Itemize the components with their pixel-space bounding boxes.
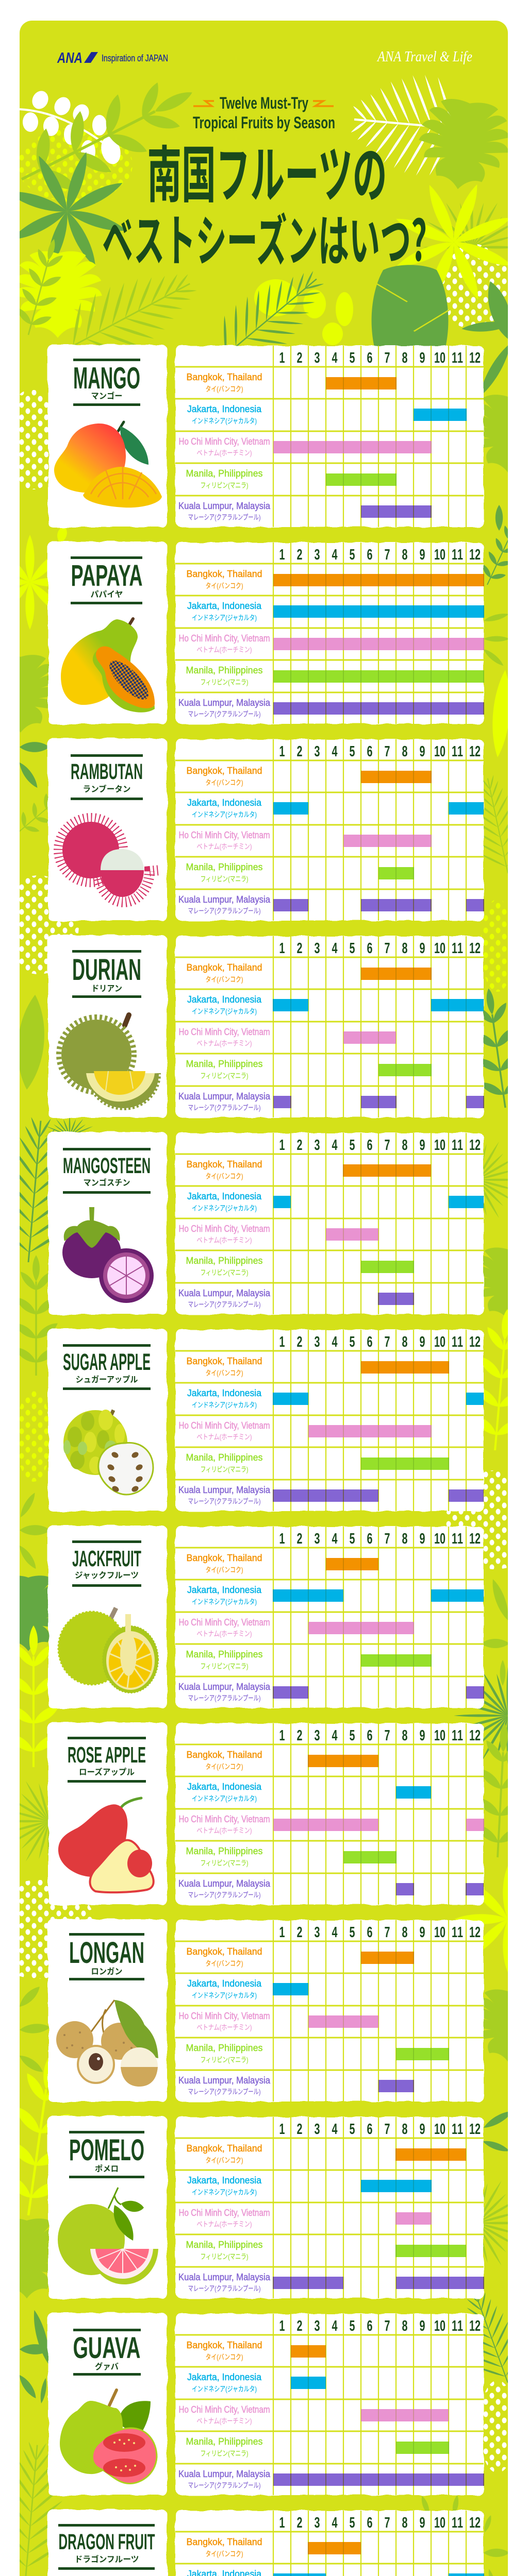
fruit name (71, 556, 142, 604)
row: Jakarta, Indonesia (187, 1978, 308, 1999)
fruit card (48, 935, 167, 1117)
month header: 123456789101112 (279, 1137, 481, 1154)
fruit name: マンゴー (91, 391, 123, 401)
fruit card (48, 1526, 167, 1708)
row: Manila, Philippines (186, 1059, 432, 1080)
row: Bangkok, Thailand: タイ(バンコク) (205, 1566, 243, 1574)
fruit card (48, 1329, 167, 1511)
row: Manila, Philippines: フィリピン(マニラ) (200, 2056, 249, 2064)
fruit card (48, 1919, 167, 2102)
row: Kuala Lumpur, Malaysia (178, 894, 484, 915)
row: Jakarta, Indonesia: インドネシア(ジャカルタ) (192, 1598, 257, 1606)
month header: 123456789101112 (279, 1727, 481, 1744)
row: Kuala Lumpur, Malaysia: Kuala Lumpur, Malaysia (178, 501, 271, 511)
month header: 123456789101112 (279, 1924, 481, 1941)
fruit card (48, 738, 167, 921)
icon: longan (56, 2000, 158, 2087)
row: Kuala Lumpur, Malaysia: Kuala Lumpur, Malaysia (178, 1091, 271, 1101)
row: Ho Chi Minh City, Vietnam: ベトナム(ホーチミン) (197, 646, 252, 654)
fruit name: ロンガン (91, 1967, 123, 1976)
row: Bangkok, Thailand: Bangkok, Thailand (187, 962, 262, 973)
fruit name: PAPAYA (71, 559, 142, 592)
month header: 123456789101112 (279, 1334, 481, 1350)
fruit name (68, 1737, 146, 1783)
row: Jakarta, Indonesia (187, 1585, 484, 1606)
panel: mangosteen (48, 1132, 484, 1314)
row: Kuala Lumpur, Malaysia (178, 1878, 484, 1899)
row: Ho Chi Minh City, Vietnam (178, 1027, 396, 1047)
fruit card (48, 2510, 167, 2576)
panel: rose apple (48, 1722, 484, 1905)
fruit name: ROSE APPLE (68, 1742, 146, 1768)
row: Kuala Lumpur, Malaysia: マレーシア(クアラルンプール) (188, 513, 261, 521)
fruit name (69, 2131, 144, 2178)
row: Kuala Lumpur, Malaysia (178, 501, 432, 521)
fruit name (58, 2524, 155, 2570)
row: Kuala Lumpur, Malaysia: マレーシア(クアラルンプール) (188, 1694, 261, 1702)
fruit name: ジャックフルーツ (75, 1571, 139, 1580)
row: Jakarta, Indonesia (187, 1782, 431, 1803)
icon: mango (54, 422, 162, 507)
row: Manila, Philippines: フィリピン(マニラ) (200, 2449, 249, 2458)
row: Kuala Lumpur, Malaysia: マレーシア(クアラルンプール) (188, 2284, 261, 2293)
row: Ho Chi Minh City, Vietnam (178, 1814, 484, 1835)
panel: durian (48, 935, 484, 1117)
row: Ho Chi Minh City, Vietnam: Ho Chi Minh City, Vietnam (178, 1224, 270, 1234)
row: Manila, Philippines: フィリピン(マニラ) (200, 1662, 249, 1670)
fruit name: ローズアップル (79, 1767, 135, 1777)
row: Ho Chi Minh City, Vietnam: Ho Chi Minh City, Vietnam (178, 436, 270, 447)
row: Manila, Philippines: フィリピン(マニラ) (200, 1268, 249, 1277)
row: Bangkok, Thailand (187, 1553, 378, 1574)
subtitle: Tropical Fruits by Season (193, 113, 335, 132)
row: Ho Chi Minh City, Vietnam: ベトナム(ホーチミン) (197, 1039, 252, 1047)
row: Manila, Philippines: Manila, Philippines (186, 2043, 263, 2053)
row: Bangkok, Thailand: タイ(バンコク) (205, 385, 243, 393)
row: Bangkok, Thailand: Bangkok, Thailand (187, 1159, 262, 1170)
row: Bangkok, Thailand: Bangkok, Thailand (187, 1750, 262, 1760)
row: Manila, Philippines (186, 862, 414, 883)
row: Ho Chi Minh City, Vietnam: Ho Chi Minh City, Vietnam (178, 1027, 270, 1037)
row: Kuala Lumpur, Malaysia (178, 1091, 484, 1112)
row: Manila, Philippines: フィリピン(マニラ) (200, 678, 249, 686)
row: Bangkok, Thailand: タイ(バンコク) (205, 582, 243, 590)
row: Jakarta, Indonesia: Jakarta, Indonesia (187, 798, 262, 808)
row: Jakarta, Indonesia: インドネシア(ジャカルタ) (192, 417, 257, 425)
fruit name: GUAVA (73, 2331, 140, 2365)
row: Bangkok, Thailand: タイ(バンコク) (205, 1172, 243, 1180)
row: Manila, Philippines (186, 2043, 449, 2064)
row: Kuala Lumpur, Malaysia: マレーシア(クアラルンプール) (188, 2088, 261, 2096)
icon: guava (60, 2390, 157, 2484)
row: Jakarta, Indonesia: インドネシア(ジャカルタ) (192, 810, 257, 819)
row: Manila, Philippines: Manila, Philippines (186, 2436, 263, 2447)
row: Ho Chi Minh City, Vietnam (178, 436, 432, 457)
row: Bangkok, Thailand: タイ(バンコク) (205, 1959, 243, 1968)
row: Jakarta, Indonesia: Jakarta, Indonesia (187, 2372, 262, 2382)
panel: mango (48, 345, 484, 527)
row: Ho Chi Minh City, Vietnam (178, 1617, 414, 1638)
panel: guava (48, 2313, 484, 2495)
row: Jakarta, Indonesia: Jakarta, Indonesia (187, 601, 262, 611)
row: Jakarta, Indonesia: インドネシア(ジャカルタ) (192, 1204, 257, 1212)
row: Jakarta, Indonesia: Jakarta, Indonesia (187, 1388, 262, 1398)
row: Bangkok, Thailand (187, 1946, 414, 1968)
row: Ho Chi Minh City, Vietnam: ベトナム(ホーチミン) (197, 1826, 252, 1835)
fruit name: マンゴスチン (84, 1178, 130, 1188)
row: Bangkok, Thailand (187, 372, 397, 393)
month header: 123456789101112 (279, 547, 481, 563)
fruit name (72, 1540, 141, 1587)
row: Bangkok, Thailand (187, 1750, 378, 1771)
row: Ho Chi Minh City, Vietnam: Ho Chi Minh City, Vietnam (178, 1814, 270, 1824)
row: Bangkok, Thailand: タイ(バンコク) (205, 1369, 243, 1377)
row: Jakarta, Indonesia: インドネシア(ジャカルタ) (192, 614, 257, 622)
month header: 123456789101112 (279, 743, 481, 760)
row: Kuala Lumpur, Malaysia: Kuala Lumpur, Malaysia (178, 2469, 271, 2479)
row: Jakarta, Indonesia: Jakarta, Indonesia (187, 1585, 262, 1595)
row: Manila, Philippines: Manila, Philippines (186, 2240, 263, 2250)
fruit card (48, 2116, 167, 2298)
fruit name: RAMBUTAN (71, 759, 143, 784)
row: Manila, Philippines: Manila, Philippines (186, 1256, 263, 1266)
icon: durian (59, 1015, 159, 1108)
panel: pomelo (48, 2116, 484, 2298)
row: Ho Chi Minh City, Vietnam: ベトナム(ホーチミン) (197, 1433, 252, 1441)
row: Bangkok, Thailand: Bangkok, Thailand (187, 372, 262, 382)
row: Jakarta, Indonesia (187, 404, 467, 425)
row: Jakarta, Indonesia: Jakarta, Indonesia (187, 994, 262, 1005)
panel: longan (48, 1919, 484, 2102)
row: Ho Chi Minh City, Vietnam: ベトナム(ホーチミン) (197, 1236, 252, 1244)
season table (175, 543, 484, 724)
row: Bangkok, Thailand: タイ(バンコク) (205, 975, 243, 984)
row: Ho Chi Minh City, Vietnam: ベトナム(ホーチミン) (197, 842, 252, 851)
row: Jakarta, Indonesia (187, 601, 484, 622)
row: Bangkok, Thailand: Bangkok, Thailand (187, 2143, 262, 2154)
fruit name: パパイヤ (91, 590, 123, 599)
row: Ho Chi Minh City, Vietnam: ベトナム(ホーチミン) (197, 2417, 252, 2425)
row: Kuala Lumpur, Malaysia: マレーシア(クアラルンプール) (188, 907, 261, 915)
row: Ho Chi Minh City, Vietnam: Ho Chi Minh City, Vietnam (178, 633, 270, 643)
row: Jakarta, Indonesia: インドネシア(ジャカルタ) (192, 2188, 257, 2196)
row: Manila, Philippines: Manila, Philippines (186, 468, 263, 479)
foliage: header right (198, 67, 528, 399)
subtitle: Twelve Must-Try (220, 94, 308, 112)
fruit name (73, 359, 140, 406)
row: Bangkok, Thailand (187, 2537, 361, 2558)
fruit name: LONGAN (69, 1936, 144, 1970)
row: Jakarta, Indonesia: インドネシア(ジャカルタ) (192, 1794, 257, 1803)
fruit name: シュガーアップル (75, 1375, 138, 1384)
row: Ho Chi Minh City, Vietnam (178, 1224, 378, 1244)
panel: dragon fruit (48, 2510, 484, 2576)
row: Kuala Lumpur, Malaysia: マレーシア(クアラルンプール) (188, 1497, 261, 1505)
row: Bangkok, Thailand (187, 2143, 466, 2164)
row: Bangkok, Thailand (187, 766, 432, 787)
row: Bangkok, Thailand (187, 1159, 431, 1180)
season table (175, 739, 484, 921)
row: Kuala Lumpur, Malaysia: Kuala Lumpur, Malaysia (178, 894, 271, 905)
row: Ho Chi Minh City, Vietnam: Ho Chi Minh City, Vietnam (178, 830, 270, 840)
row: Jakarta, Indonesia: Jakarta, Indonesia (187, 1978, 262, 1989)
row: Bangkok, Thailand: Bangkok, Thailand (187, 2537, 262, 2547)
season table (175, 1920, 484, 2102)
fruit name (63, 1344, 151, 1390)
row: Jakarta, Indonesia (187, 2175, 432, 2196)
row: Manila, Philippines (186, 665, 484, 686)
ANA logo (57, 50, 168, 66)
panel: papaya (48, 541, 484, 724)
row: Ho Chi Minh City, Vietnam: ベトナム(ホーチミン) (197, 2220, 252, 2228)
row: Ho Chi Minh City, Vietnam (178, 2404, 449, 2425)
row: Manila, Philippines: Manila, Philippines (186, 1059, 263, 1069)
row: Kuala Lumpur, Malaysia (178, 2469, 484, 2489)
fruit name (69, 1933, 144, 1980)
row: Bangkok, Thailand (187, 2340, 326, 2361)
icon: jackfruit (58, 1608, 158, 1693)
row: Kuala Lumpur, Malaysia: Kuala Lumpur, Malaysia (178, 2075, 271, 2086)
row: Bangkok, Thailand: タイ(バンコク) (205, 778, 243, 787)
row: Manila, Philippines: フィリピン(マニラ) (200, 1072, 249, 1080)
row: Manila, Philippines (186, 2436, 449, 2458)
month header: 123456789101112 (279, 2318, 481, 2334)
row: Jakarta, Indonesia (187, 2569, 484, 2576)
row: Manila, Philippines: フィリピン(マニラ) (200, 875, 249, 883)
row: Manila, Philippines: フィリピン(マニラ) (200, 481, 249, 489)
row: Jakarta, Indonesia (187, 798, 484, 819)
row: Jakarta, Indonesia: インドネシア(ジャカルタ) (192, 1991, 257, 1999)
month header: 123456789101112 (279, 2515, 481, 2531)
row: Kuala Lumpur, Malaysia: Kuala Lumpur, Malaysia (178, 2272, 271, 2282)
fruit name: POMELO (69, 2133, 144, 2167)
season table (175, 1527, 484, 1708)
row: Bangkok, Thailand: Bangkok, Thailand (187, 569, 262, 579)
row: Ho Chi Minh City, Vietnam (178, 2208, 432, 2228)
row: Manila, Philippines: Manila, Philippines (186, 665, 263, 675)
fruit name (72, 950, 141, 998)
fruit card (48, 2313, 167, 2495)
subtitle (193, 94, 335, 132)
season table (175, 346, 484, 527)
row: Manila, Philippines: Manila, Philippines (186, 1452, 263, 1463)
row: Bangkok, Thailand: タイ(バンコク) (205, 1762, 243, 1771)
row: Kuala Lumpur, Malaysia: マレーシア(クアラルンプール) (188, 1104, 261, 1112)
row: Jakarta, Indonesia: Jakarta, Indonesia (187, 1191, 262, 1201)
ANA logo: ANA (57, 50, 82, 66)
row: Manila, Philippines (186, 1846, 397, 1867)
row: Kuala Lumpur, Malaysia: マレーシア(クアラルンプール) (188, 2481, 261, 2489)
row: Ho Chi Minh City, Vietnam: Ho Chi Minh City, Vietnam (178, 2404, 270, 2415)
season table (175, 2117, 484, 2298)
fruit name: DRAGON FRUIT (59, 2530, 155, 2554)
row: Kuala Lumpur, Malaysia: マレーシア(クアラルンプール) (188, 710, 261, 718)
row: Kuala Lumpur, Malaysia: Kuala Lumpur, Malaysia (178, 698, 271, 708)
row: Jakarta, Indonesia: インドネシア(ジャカルタ) (192, 2385, 257, 2393)
row: Bangkok, Thailand: タイ(バンコク) (205, 2550, 243, 2558)
row: Ho Chi Minh City, Vietnam: ベトナム(ホーチミン) (197, 2023, 252, 2031)
fruit name: ドリアン (91, 985, 122, 993)
row: Bangkok, Thailand (187, 569, 484, 590)
ANA logo: Inspiration of JAPAN (102, 53, 168, 63)
icon: mangosteen (62, 1207, 154, 1303)
fruit name: ランブータン (82, 784, 131, 794)
fruit card (48, 1132, 167, 1314)
fruit card (48, 345, 167, 527)
row: Kuala Lumpur, Malaysia: Kuala Lumpur, Malaysia (178, 1878, 271, 1889)
fruit name: DURIAN (72, 953, 141, 987)
fruit name: SUGAR APPLE (63, 1349, 151, 1375)
season table (175, 1723, 484, 1905)
fruit name: MANGO (73, 361, 140, 395)
row: Manila, Philippines: Manila, Philippines (186, 1649, 263, 1659)
row: Kuala Lumpur, Malaysia (178, 1485, 484, 1505)
row: Kuala Lumpur, Malaysia (178, 1288, 414, 1309)
fruit name: ドラゴンフルーツ (74, 2554, 139, 2564)
icon: papaya (61, 619, 155, 713)
panel: jackfruit (48, 1526, 484, 1708)
row: Jakarta, Indonesia: インドネシア(ジャカルタ) (192, 1401, 257, 1409)
row: Jakarta, Indonesia (187, 1388, 484, 1409)
row: Manila, Philippines (186, 1452, 449, 1473)
row: Jakarta, Indonesia: インドネシア(ジャカルタ) (192, 1007, 257, 1015)
month header: 123456789101112 (279, 940, 481, 957)
row: Jakarta, Indonesia (187, 994, 484, 1015)
fruit name (73, 2329, 141, 2376)
row: Ho Chi Minh City, Vietnam: Ho Chi Minh City, Vietnam (178, 2208, 270, 2218)
row: Bangkok, Thailand (187, 962, 432, 984)
row: Manila, Philippines: フィリピン(マニラ) (200, 1859, 249, 1867)
row: Ho Chi Minh City, Vietnam (178, 830, 432, 851)
row: Ho Chi Minh City, Vietnam (178, 633, 484, 654)
row: Manila, Philippines: Manila, Philippines (186, 862, 263, 872)
row: Jakarta, Indonesia (187, 2372, 326, 2393)
icon: pomelo (58, 2188, 158, 2284)
row: Manila, Philippines (186, 1649, 432, 1670)
icon: rose apple (58, 1798, 154, 1892)
row: Ho Chi Minh City, Vietnam: Ho Chi Minh City, Vietnam (178, 1420, 270, 1431)
row: Kuala Lumpur, Malaysia (178, 698, 484, 718)
row: Manila, Philippines (186, 2240, 466, 2261)
row: Kuala Lumpur, Malaysia (178, 1682, 484, 1702)
month header: 123456789101112 (279, 2121, 481, 2138)
season table (175, 936, 484, 1117)
icon: rambutan (59, 818, 160, 902)
row: Bangkok, Thailand: Bangkok, Thailand (187, 1553, 262, 1563)
row: Manila, Philippines: フィリピン(マニラ) (200, 2252, 249, 2261)
fruit name: グァバ (95, 2362, 119, 2371)
row: Manila, Philippines (186, 468, 397, 489)
row: Bangkok, Thailand: Bangkok, Thailand (187, 1356, 262, 1366)
title (102, 125, 427, 277)
row: Bangkok, Thailand: Bangkok, Thailand (187, 1946, 262, 1957)
season table (175, 2314, 484, 2495)
icon: sugar apple (63, 1410, 153, 1495)
row: Jakarta, Indonesia: Jakarta, Indonesia (187, 1782, 262, 1792)
row: Bangkok, Thailand: タイ(バンコク) (205, 2353, 243, 2361)
row: Bangkok, Thailand: Bangkok, Thailand (187, 2340, 262, 2350)
row: Jakarta, Indonesia: Jakarta, Indonesia (187, 404, 262, 414)
season table (175, 2511, 484, 2576)
row: Kuala Lumpur, Malaysia (178, 2272, 484, 2293)
row: Manila, Philippines: フィリピン(マニラ) (200, 1465, 249, 1473)
row: Kuala Lumpur, Malaysia (178, 2075, 414, 2096)
row: Ho Chi Minh City, Vietnam (178, 2011, 378, 2031)
row: Ho Chi Minh City, Vietnam: ベトナム(ホーチミン) (197, 1630, 252, 1638)
month header: 123456789101112 (279, 1531, 481, 1547)
fruit name: MANGOSTEEN (63, 1154, 151, 1178)
row: Ho Chi Minh City, Vietnam (178, 1420, 432, 1441)
fruit name (63, 1148, 151, 1194)
season table (175, 1330, 484, 1511)
fruit card (48, 541, 167, 724)
row: Ho Chi Minh City, Vietnam: Ho Chi Minh City, Vietnam (178, 2011, 270, 2021)
fruit card (48, 1722, 167, 1905)
row: Kuala Lumpur, Malaysia: マレーシア(クアラルンプール) (188, 1891, 261, 1899)
fruit name: ポメロ (95, 2164, 119, 2174)
row: Bangkok, Thailand (187, 1356, 449, 1377)
season table (175, 1133, 484, 1314)
row: Manila, Philippines (186, 1256, 414, 1277)
foliage: left margin (20, 390, 162, 2576)
month header: 123456789101112 (279, 350, 481, 366)
row: Bangkok, Thailand: Bangkok, Thailand (187, 766, 262, 776)
row: Jakarta, Indonesia (187, 1191, 484, 1212)
row: Kuala Lumpur, Malaysia: Kuala Lumpur, Malaysia (178, 1682, 271, 1692)
foliage: header left (20, 82, 196, 345)
row: Ho Chi Minh City, Vietnam: ベトナム(ホーチミン) (197, 449, 252, 457)
row: Kuala Lumpur, Malaysia: マレーシア(クアラルンプール) (188, 1300, 261, 1309)
fruit name: JACKFRUIT (72, 1546, 141, 1571)
foliage: right margin (422, 345, 508, 2576)
ANA Travel & Life wordmark: ANA Travel & Life (376, 48, 472, 65)
fruit name (71, 754, 143, 800)
row: Kuala Lumpur, Malaysia: Kuala Lumpur, Malaysia (178, 1485, 271, 1495)
panel: sugar apple (48, 1329, 484, 1511)
row: Bangkok, Thailand: タイ(バンコク) (205, 2156, 243, 2164)
row: Jakarta, Indonesia: Jakarta, Indonesia (187, 2175, 262, 2185)
panel: rambutan (48, 738, 484, 921)
row: Ho Chi Minh City, Vietnam: Ho Chi Minh City, Vietnam (178, 1617, 270, 1628)
row: Kuala Lumpur, Malaysia: Kuala Lumpur, Malaysia (178, 1288, 271, 1298)
row: Manila, Philippines: Manila, Philippines (186, 1846, 263, 1856)
